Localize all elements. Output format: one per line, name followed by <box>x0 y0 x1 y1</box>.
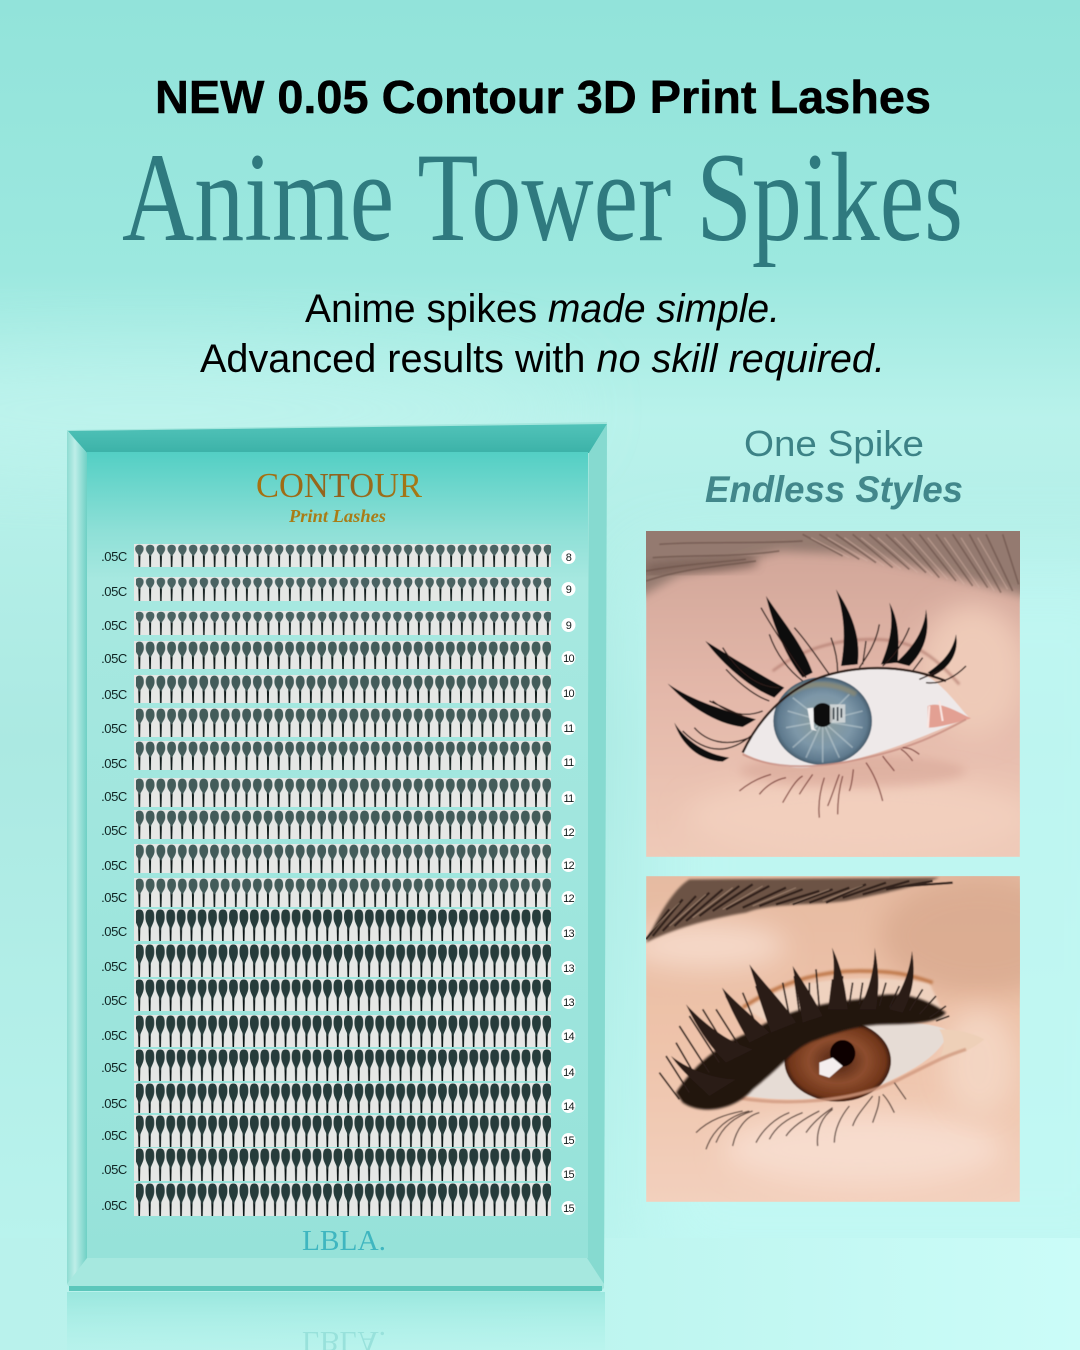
lash row 19 <box>134 1148 551 1181</box>
iris <box>773 677 872 765</box>
tagline: Endless Styles <box>705 469 963 510</box>
length badges: 11 <box>563 757 574 769</box>
box top flap <box>68 424 607 453</box>
tagline <box>705 423 963 510</box>
lash mass <box>676 994 946 1110</box>
thickness labels: .05C <box>101 1060 127 1075</box>
subtitle: Anime spikes made simple. <box>305 287 780 331</box>
lash line <box>743 668 946 753</box>
lash row 9 <box>134 810 551 839</box>
thickness labels: .05C <box>101 890 127 905</box>
length badges: 15 <box>563 1203 574 1215</box>
sclera <box>743 668 969 768</box>
eyelid crease <box>773 639 959 684</box>
subtitle: Advanced results with no skill required. <box>200 337 885 381</box>
eyelid crease <box>743 971 933 1008</box>
length badges: 9 <box>566 620 572 632</box>
length badges: 11 <box>563 793 574 805</box>
lash strips <box>134 544 551 1216</box>
thickness labels: .05C <box>101 618 127 633</box>
brand: Print Lashes: Print Lashes <box>288 506 386 526</box>
brand: LBLA: LBLA. <box>302 1226 386 1257</box>
spikes <box>668 589 957 762</box>
subtitle <box>200 287 885 381</box>
length badges: 15 <box>563 1135 574 1147</box>
lash row 2 <box>134 577 551 601</box>
lash spikes <box>671 948 914 1096</box>
box bottom flap <box>67 1258 604 1291</box>
thickness labels: .05C <box>101 789 127 804</box>
box inner panel <box>87 452 588 1258</box>
lash row 1 <box>134 544 551 567</box>
lash row 15 <box>134 1015 551 1047</box>
iris <box>784 1020 891 1102</box>
lash row 12 <box>134 909 551 941</box>
length badges: 10 <box>563 688 574 700</box>
length badges: 12 <box>563 893 574 905</box>
thickness labels: .05C <box>101 1128 127 1143</box>
thickness labels: .05C <box>101 924 127 939</box>
thickness labels: .05C <box>101 1096 127 1111</box>
lower lid <box>736 1049 966 1102</box>
lash row 20 <box>134 1183 551 1216</box>
length badges: 11 <box>563 723 574 735</box>
thickness labels: .05C <box>101 1028 127 1043</box>
thickness labels: .05C <box>101 959 127 974</box>
tagline: One Spike <box>744 423 924 464</box>
lash row 6 <box>134 708 551 737</box>
box right flap <box>586 424 607 1284</box>
lash row 10 <box>134 844 551 873</box>
photo: blue eye with spikes <box>646 531 1020 857</box>
box left flap <box>67 431 87 1284</box>
pupil and reflection <box>807 703 845 731</box>
thickness labels: .05C <box>101 756 127 771</box>
heading: product line: NEW 0.05 Contour 3D Print Lashes <box>155 71 931 123</box>
fine upper lashes <box>659 969 949 1099</box>
length badges: 13 <box>563 997 574 1009</box>
lash row 18 <box>134 1115 551 1147</box>
thickness labels <box>101 549 127 1213</box>
thickness labels: .05C <box>101 1162 127 1177</box>
eyebrow <box>646 878 953 943</box>
length badges: 15 <box>563 1169 574 1181</box>
lash row 14 <box>134 979 551 1011</box>
lash row 7 <box>134 741 551 770</box>
thickness labels: .05C <box>101 993 127 1008</box>
lash row 11 <box>134 878 551 907</box>
lash row 13 <box>134 944 551 977</box>
length badges: 8 <box>566 552 572 564</box>
sclera <box>746 1023 949 1099</box>
length badges: 12 <box>563 860 574 872</box>
eyebrow <box>646 531 1020 600</box>
length badges: 9 <box>566 584 572 596</box>
lash row 4 <box>134 641 551 669</box>
length badges: 14 <box>563 1031 574 1043</box>
thickness labels: .05C <box>101 549 127 564</box>
panel: lash box <box>67 422 607 1292</box>
box outer <box>67 422 607 1292</box>
thickness labels: .05C <box>101 584 127 599</box>
upper lid <box>747 978 944 1022</box>
lash row 17 <box>134 1083 551 1113</box>
fine lashes <box>683 608 966 749</box>
length badges: 14 <box>563 1067 574 1079</box>
thickness labels: .05C <box>101 858 127 873</box>
length badges: 14 <box>563 1101 574 1113</box>
length badges: 12 <box>563 827 574 839</box>
thickness labels: .05C <box>101 823 127 838</box>
length badges <box>562 550 576 1215</box>
lash row 3 <box>134 611 551 635</box>
thickness labels: .05C <box>101 1198 127 1213</box>
thickness labels: .05C <box>101 651 127 666</box>
length badges: 13 <box>563 963 574 975</box>
lower lid <box>743 719 966 766</box>
thickness labels: .05C <box>101 721 127 736</box>
photo: brown eye with wispy lashes <box>646 876 1020 1202</box>
lower lashes <box>739 748 919 818</box>
lash row 5 <box>134 675 551 703</box>
length badges: 13 <box>563 928 574 940</box>
lash row 8 <box>134 778 551 807</box>
length badges: 10 <box>563 653 574 665</box>
product reflection <box>67 1292 605 1350</box>
thickness labels: .05C <box>101 687 127 702</box>
lower lashes <box>696 1083 906 1149</box>
brand: CONTOUR: CONTOUR <box>256 466 423 505</box>
lash row 16 <box>134 1049 551 1081</box>
